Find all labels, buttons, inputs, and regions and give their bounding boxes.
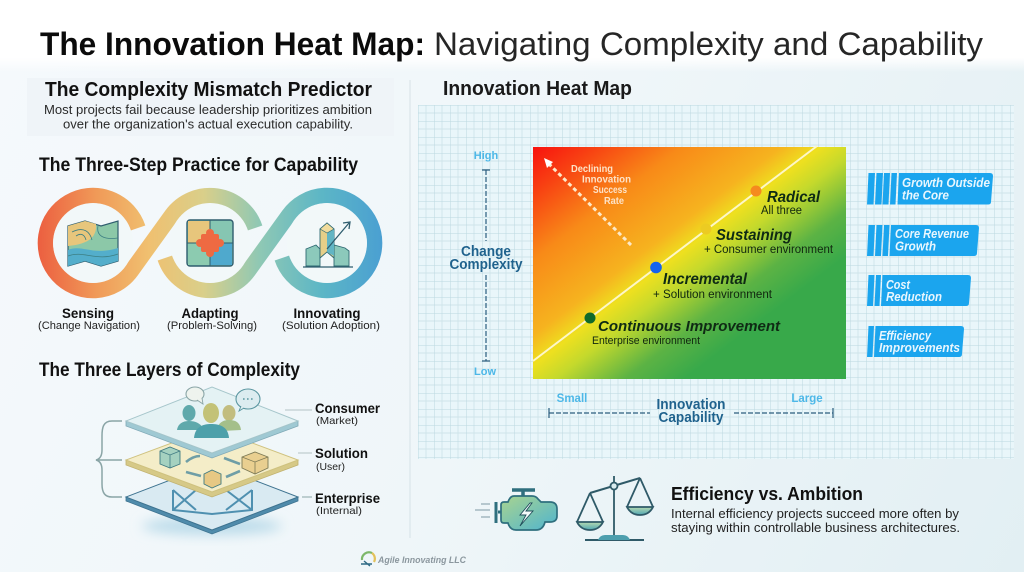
- callout: efficiency vs ambition: Internal efficiency projects succeed more often by: [671, 506, 960, 521]
- step label: innovating: (Solution Adoption): [282, 320, 380, 332]
- text: mismatch description: over the organization's actual execution capability.: [63, 116, 353, 132]
- callout: efficiency vs ambition: [671, 483, 960, 535]
- layer label: consumer: (Market): [316, 415, 358, 427]
- tag: cost reduction: [867, 275, 971, 306]
- icon: topographic map: [68, 221, 118, 266]
- layer label: consumer: [285, 400, 381, 427]
- step label: sensing: Sensing: [62, 305, 114, 321]
- heading: three layers: The Three Layers of Complexity: [39, 359, 300, 381]
- tag: growth outside the core: Growth Outside: [902, 175, 990, 190]
- step label: adapting: [167, 305, 257, 332]
- layer: enterprise: [126, 464, 298, 534]
- horizontal axis: innovation capability: Innovation: [656, 397, 726, 413]
- label: declining innovation success rate: Rate: [604, 195, 624, 207]
- layer label: consumer: Consumer: [315, 400, 381, 416]
- step label: sensing: (Change Navigation): [38, 320, 140, 332]
- tag: growth outside the core: the Core: [902, 188, 949, 202]
- marker: continuous improvement: [584, 312, 781, 347]
- vertical axis: change complexity: Change: [461, 244, 511, 260]
- infinity ribbon with three steps: [45, 195, 375, 291]
- layer: solution: [126, 428, 298, 497]
- tag: cost reduction: Cost: [886, 277, 911, 292]
- step label: adapting: Adapting: [182, 305, 238, 321]
- heading: mismatch predictor: The Complexity Mismatch Predictor: [45, 78, 372, 101]
- layer label: enterprise: [302, 490, 380, 517]
- vertical axis: change complexity: [450, 150, 522, 378]
- tag: core revenue growth: Growth: [895, 238, 936, 254]
- tag: core revenue growth: [867, 225, 979, 256]
- panel: heat map grid: [418, 105, 1014, 459]
- layer label: enterprise: Enterprise: [315, 490, 380, 506]
- marker: radical: All three: [761, 205, 802, 217]
- vertical axis: change complexity: Complexity: [450, 257, 522, 273]
- icon: rising tower: [303, 222, 353, 267]
- column divider: [409, 80, 411, 538]
- horizontal axis: innovation capability: Large: [791, 393, 823, 405]
- marker: continuous improvement: Enterprise environment: [592, 335, 700, 347]
- marker: continuous improvement: Continuous Improvement: [598, 318, 781, 335]
- tag: growth outside the core: [867, 173, 993, 204]
- tag: efficiency improvements: Efficiency: [879, 328, 932, 343]
- marker: sustaining: + Consumer environment: [704, 244, 834, 256]
- callout: efficiency vs ambition: Efficiency vs. Ambition: [671, 483, 863, 504]
- step label: adapting: (Problem-Solving): [167, 320, 257, 332]
- layer: consumer: [126, 387, 298, 458]
- step label: sensing: [38, 305, 140, 332]
- horizontal axis: innovation capability: Small: [557, 393, 587, 405]
- logo: agile innovating: Agile Innovating LLC: [377, 555, 466, 566]
- marker: sustaining: Sustaining: [716, 227, 793, 244]
- icon: people: [177, 403, 241, 438]
- horizontal axis: innovation capability: [549, 393, 833, 426]
- icon: speech bubbles: [186, 387, 260, 411]
- marker: radical: [750, 186, 821, 217]
- vertical axis: change complexity: High: [474, 150, 498, 162]
- text: mismatch description: Most projects fail because leadership prioritizes ambition: [44, 102, 372, 117]
- label: declining innovation success rate: Innovation: [582, 174, 631, 186]
- marker: incremental: [650, 262, 773, 301]
- callout: efficiency vs ambition: staying within controllable business architectures.: [671, 520, 960, 535]
- arrow: declining success rate: [544, 158, 631, 245]
- layered complexity stack: [96, 387, 298, 535]
- vertical axis: change complexity: Low: [474, 366, 496, 378]
- icon: balance scale: [577, 476, 653, 540]
- title: [40, 26, 983, 62]
- marker: incremental: Incremental: [663, 271, 748, 288]
- horizontal axis: innovation capability: Capability: [658, 410, 724, 426]
- title: Navigating Complexity and Capability: [434, 26, 983, 62]
- logo: agile innovating: [361, 552, 466, 566]
- title band: [0, 0, 1024, 72]
- heading: innovation heat map: Innovation Heat Map: [443, 77, 632, 100]
- step label: innovating: Innovating: [294, 305, 360, 321]
- heading: three-step practice: The Three-Step Practice for Capability: [39, 154, 358, 176]
- panel: complexity mismatch predictor: [27, 78, 394, 136]
- label: declining innovation success rate: Success: [593, 184, 627, 196]
- tag: efficiency improvements: [867, 326, 964, 357]
- layer label: solution: [298, 445, 368, 473]
- marker: incremental: + Solution environment: [653, 289, 773, 301]
- label: declining innovation success rate: Declining: [571, 163, 613, 175]
- tag: core revenue growth: Core Revenue: [895, 226, 969, 241]
- icon: puzzle: [187, 220, 233, 266]
- marker: radical: Radical: [767, 189, 821, 206]
- layer label: solution: (User): [316, 461, 345, 473]
- marker: sustaining: [700, 224, 834, 256]
- diagonal capability line: [533, 146, 817, 361]
- bracket: [96, 421, 122, 497]
- step label: innovating: [282, 305, 380, 332]
- heat map chart: [533, 146, 846, 379]
- tag: efficiency improvements: Improvements: [879, 340, 960, 355]
- layer label: enterprise: (Internal): [316, 505, 362, 517]
- icon: engine: [475, 490, 557, 530]
- layer label: solution: Solution: [315, 445, 368, 461]
- tag: cost reduction: Reduction: [886, 289, 942, 304]
- title: The Innovation Heat Map:: [40, 26, 425, 62]
